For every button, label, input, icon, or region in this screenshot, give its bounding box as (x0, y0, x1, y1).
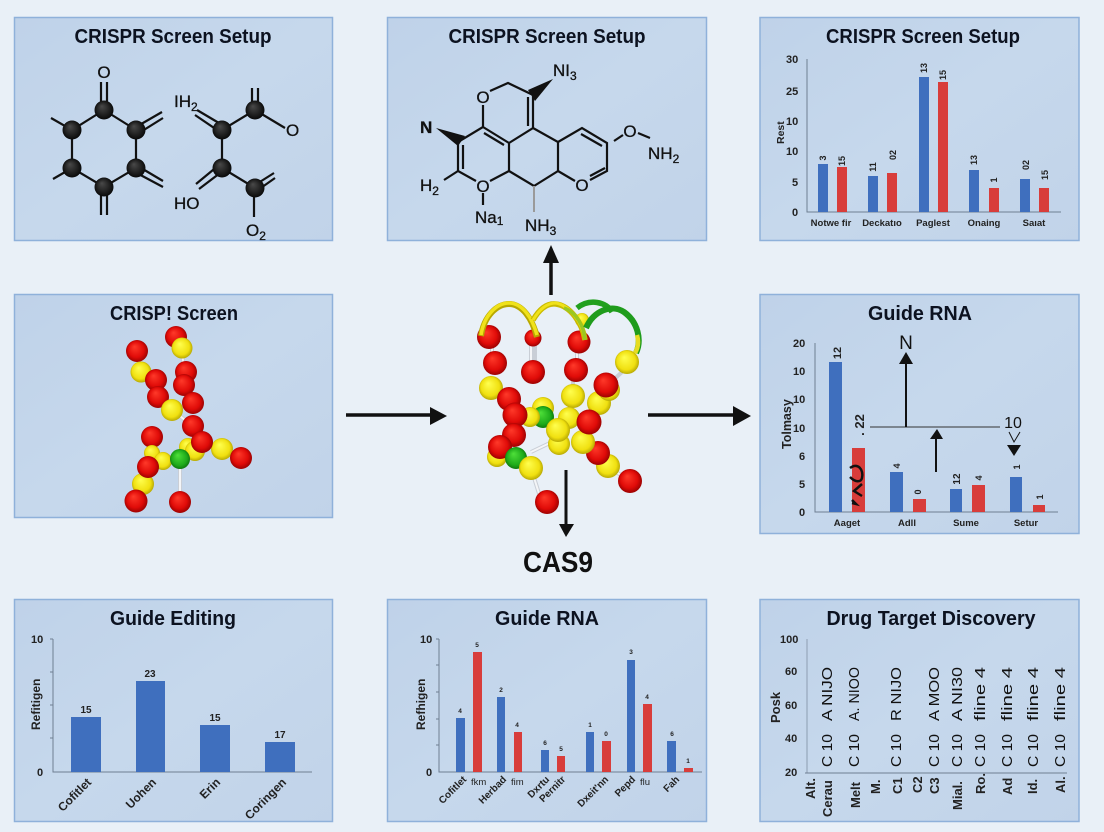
chart: rotated value labels: C1 (890, 777, 905, 794)
chart: rotated value labels (768, 634, 1069, 817)
bar chart: paired bars (775, 54, 1061, 229)
chart: rotated value labels: Posk (768, 691, 783, 723)
chart: rotated value labels: C 10 (888, 734, 905, 767)
bar chart: single series: 17 (274, 730, 286, 741)
bar chart: paired bars: Onaing (968, 218, 1001, 229)
bar chart: paired bars: 20 (793, 338, 805, 350)
bar chart: paired bars: 1 (686, 758, 690, 765)
bar chart: single series: 15 (209, 713, 221, 724)
bar chart: paired bars: 5 (559, 746, 563, 753)
molecule: chain structure: IH (174, 92, 191, 111)
chart: rotated value labels: A NIJO (819, 667, 836, 721)
bar chart: paired bars: Deckatıo (862, 218, 902, 229)
bar chart: paired bars: 6 (543, 740, 547, 747)
bar chart: single series (29, 634, 312, 822)
annotation: arrows and labels (870, 333, 1022, 472)
molecule: chain structure: O (286, 121, 299, 140)
chart: rotated value labels: Id. (1025, 779, 1040, 794)
chart: rotated value labels: 60 (785, 700, 797, 712)
bar chart: paired bars: 0 (799, 507, 805, 519)
chart: rotated value labels: Mial. (950, 781, 965, 810)
molecule: central CAS9 structure (477, 302, 642, 514)
bar chart: paired bars: . 22 (852, 414, 867, 436)
bar chart: paired bars: 30 (786, 54, 798, 66)
chart: rotated value labels: A MOO (926, 667, 943, 721)
bar chart: paired bars: Pernitr (538, 774, 568, 805)
molecule: chain structure: HO (174, 194, 200, 213)
chart: rotated value labels: Al. (1053, 776, 1068, 793)
bar chart: paired bars: 10 (786, 146, 798, 158)
bar chart: paired bars (414, 634, 702, 810)
heading: panel 1: CRISPR Screen Setup (74, 26, 272, 48)
bar chart: paired bars: 1 (1012, 464, 1022, 470)
chart: rotated value labels: 60 (785, 666, 797, 678)
chart: rotated value labels: fline 4 (1052, 667, 1069, 721)
panel: Guide Editing (14, 600, 332, 822)
bar chart: single series: 15 (80, 705, 92, 716)
chart: rotated value labels: C 10 (1052, 734, 1069, 767)
bar chart: paired bars: 4 (645, 694, 649, 701)
molecule: polycyclic structure: O (476, 177, 490, 196)
chart: rotated value labels: 20 (785, 767, 797, 779)
chart: rotated value labels: C2 (910, 776, 925, 793)
molecule: polycyclic structure: O (575, 176, 589, 195)
chart: rotated value labels: fline 4 (999, 667, 1016, 721)
bar chart: paired bars: Rest (775, 121, 787, 144)
molecule: polycyclic structure (420, 61, 680, 238)
bar chart: paired bars: Pepd (613, 774, 638, 799)
bar chart: paired bars: 13 (969, 155, 979, 165)
annotation: squiggle on bar (850, 466, 862, 504)
bar chart: paired bars: 10 (420, 634, 432, 646)
molecule: polycyclic structure: NH (525, 216, 550, 235)
bar chart: paired bars: Dxrtu (526, 774, 552, 801)
bar chart: single series: 0 (37, 767, 43, 779)
bar chart: paired bars: 15 (938, 70, 948, 80)
chart: rotated value labels: C 10 (972, 734, 989, 767)
bar chart: paired bars: 1 (989, 177, 999, 183)
bar chart: paired bars: 0 (426, 767, 432, 779)
bar chart: paired bars: 5 (799, 479, 805, 491)
chart: rotated value labels: Melt (848, 781, 863, 808)
bar chart: paired bars: 1 (588, 722, 592, 729)
bar chart: single series: Erin (197, 775, 223, 802)
chart: rotated value labels: C 10 (819, 734, 836, 767)
arrow: centre down to CAS9 (559, 470, 574, 537)
bar chart: paired bars: Sume (953, 518, 979, 529)
bar chart: paired bars: 12 (832, 347, 844, 359)
bar chart: paired bars: 10 (793, 394, 805, 406)
bar chart: paired bars: 15 (837, 156, 847, 166)
chart: rotated value labels: Ro. (973, 773, 988, 794)
chart: rotated value labels: Ad (1000, 778, 1015, 795)
molecule: ring structure: O (97, 63, 111, 82)
bar chart: paired bars: Aaget (834, 518, 861, 529)
bar chart: paired bars: 13 (919, 63, 929, 73)
heading: panel 8: Drug Target Discovery (826, 608, 1036, 630)
chart: rotated value labels: M. (868, 780, 883, 794)
bar chart: paired bars: 02 (888, 150, 898, 160)
molecule: polycyclic structure: H (420, 176, 432, 195)
bar chart: paired bars: Adll (898, 518, 916, 529)
bar chart: paired bars: 4 (515, 722, 519, 729)
panel: Drug Target Discovery (760, 600, 1079, 822)
bar chart: paired bars: Tolmasy (780, 399, 794, 449)
bar chart: paired bars: 25 (786, 86, 798, 98)
bar chart: paired bars: Refhigen (414, 679, 428, 730)
arrow: left panel to centre (346, 407, 447, 425)
bar chart: paired bars: 10 (786, 116, 798, 128)
heading: panel 4: CRISP! Screen (110, 303, 238, 325)
bar chart: paired bars (780, 338, 1058, 529)
bar chart: paired bars: Herbad (477, 774, 509, 806)
heading: panel 2: CRISPR Screen Setup (448, 26, 646, 48)
bar chart: single series: Coringen (242, 775, 289, 822)
bar chart: paired bars: Cofitlet (437, 774, 470, 806)
bar chart: paired bars: flu (640, 777, 650, 788)
bar chart: paired bars: 10 (793, 366, 805, 378)
bar chart: paired bars: 1 (1035, 494, 1045, 500)
molecule: polycyclic structure: NH (648, 144, 673, 163)
bar chart: paired bars: Paglest (916, 218, 951, 229)
molecule: chain structure: 2 (259, 229, 266, 243)
panel: CRISPR screen setup, bar chart (760, 18, 1079, 240)
bar chart: paired bars: 10 (793, 423, 805, 435)
panel: Guide RNA with annotated bar chart (760, 294, 1079, 534)
bar chart: paired bars: 12 (952, 473, 963, 485)
molecule: polycyclic structure: 2 (432, 184, 439, 198)
chart: rotated value labels: 100 (780, 634, 798, 646)
molecule: polycyclic structure: O (623, 122, 637, 141)
bar chart: paired bars: 02 (1021, 160, 1031, 170)
chart: rotated value labels: A. NIOO (846, 667, 863, 721)
panel: CRISPR screen setup, polycyclic molecule (388, 18, 706, 240)
chart: rotated value labels: C 10 (949, 734, 966, 767)
chart: rotated value labels: C 10 (926, 734, 943, 767)
molecule: ring structure (51, 63, 163, 215)
bar chart: paired bars: 6 (799, 451, 805, 463)
bar chart: paired bars: 0 (792, 207, 798, 219)
annotation: arrows and labels: 10 (1004, 415, 1022, 432)
chart: rotated value labels: fline 4 (1025, 667, 1042, 721)
panel: CRISP! screen, ball and stick model (14, 294, 332, 518)
bar chart: single series: 10 (31, 634, 43, 646)
molecule: polycyclic structure: 3 (550, 224, 557, 238)
chart: rotated value labels: C 10 (846, 734, 863, 767)
bar chart: single series: Cofitlet (55, 775, 94, 814)
bar chart: single series: Refitigen (29, 679, 43, 730)
molecule: chain structure: 2 (191, 100, 198, 114)
bar chart: paired bars: 0 (913, 489, 923, 495)
bar chart: paired bars: 4 (892, 463, 902, 469)
bar chart: paired bars: Dxeit'nn (576, 774, 611, 810)
arrow: centre to right panel (648, 406, 751, 426)
bar chart: paired bars: 11 (868, 162, 878, 172)
heading: panel 7: Guide RNA (495, 608, 599, 630)
chart: rotated value labels: A NI30 (949, 667, 966, 721)
annotation: arrows and labels: N (899, 333, 913, 354)
heading: panel 5: Guide RNA (868, 303, 972, 325)
heading: panel 3: CRISPR Screen Setup (826, 26, 1020, 48)
chart: rotated value labels: R NIJO (888, 667, 905, 721)
molecule: chain structure (174, 88, 299, 243)
bar chart: paired bars: 2 (499, 687, 503, 694)
chart: rotated value labels: Cerau (820, 780, 835, 817)
label: CAS9: CAS9 (523, 547, 593, 579)
bar chart: paired bars: 3 (818, 155, 828, 161)
bar chart: paired bars: fkm (471, 777, 486, 788)
panel: Guide RNA lower chart (388, 600, 706, 822)
bar chart: paired bars: 3 (629, 649, 633, 656)
bar chart: paired bars: fim (511, 777, 524, 788)
bar chart: paired bars: 0 (604, 731, 608, 738)
bar chart: paired bars: 15 (1040, 170, 1050, 180)
bar chart: paired bars: Notwe fir (811, 218, 852, 229)
molecule: polycyclic structure: O (476, 88, 490, 107)
bar chart: paired bars: 4 (974, 475, 984, 481)
molecule: polycyclic structure: Na (475, 208, 497, 227)
molecule: polycyclic structure: 1 (497, 214, 504, 228)
molecule: ball and stick (124, 326, 252, 513)
molecule: chain structure: O (246, 221, 259, 240)
panel: CRISPR screen setup, small molecules (14, 18, 332, 243)
arrow: centre up to setup panel (543, 245, 559, 295)
bar chart: paired bars: 4 (458, 708, 462, 715)
bar chart: paired bars: Fah (662, 774, 682, 795)
chart: rotated value labels: C 10 (1025, 734, 1042, 767)
molecule: polycyclic structure: N (420, 118, 432, 137)
bar chart: single series: 23 (144, 669, 156, 680)
bar chart: paired bars: Saıat (1023, 218, 1046, 229)
bar chart: paired bars: 6 (670, 731, 674, 738)
chart: rotated value labels: Alt. (803, 778, 818, 799)
bar chart: paired bars: 5 (792, 177, 798, 189)
heading: panel 6: Guide Editing (110, 608, 236, 630)
chart: rotated value labels: fline 4 (972, 667, 989, 721)
bar chart: single series: Uohen (123, 775, 159, 812)
molecule: polycyclic structure: NI (553, 61, 570, 80)
bar chart: paired bars: Setur (1014, 518, 1038, 529)
chart: rotated value labels: 40 (785, 733, 797, 745)
chart: rotated value labels: C 10 (999, 734, 1016, 767)
molecule: polycyclic structure: 3 (570, 69, 577, 83)
bar chart: paired bars: 5 (475, 642, 479, 649)
chart: rotated value labels: C3 (927, 777, 942, 794)
molecule: polycyclic structure: 2 (673, 152, 680, 166)
